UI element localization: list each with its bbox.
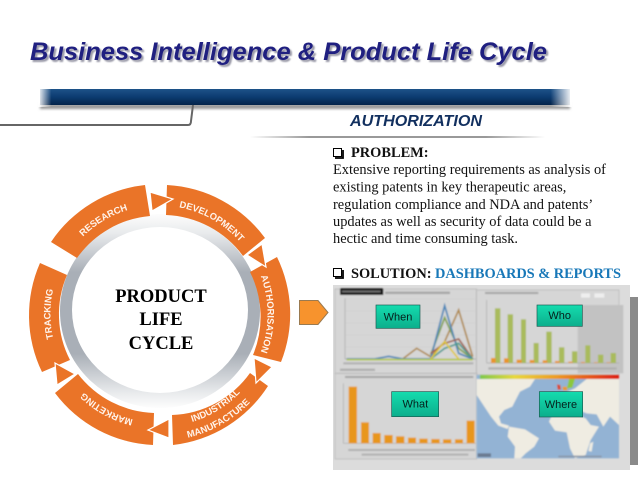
- problem text block: Extensive reporting requirements as analysis of: [333, 162, 606, 178]
- panel: where map: [477, 375, 619, 458]
- panel: who bar chart: [477, 290, 623, 375]
- section heading: authorization: AUTHORIZATION: [349, 113, 482, 130]
- problem text block: updates as well as security of data could be a: [333, 214, 592, 230]
- button: what: [392, 392, 439, 417]
- button: who: [537, 305, 582, 326]
- segment: industrial manufacture: MANUFACTURE: [186, 398, 250, 438]
- problem text block: PROBLEM:: [351, 145, 429, 161]
- segment: marketing: MARKETING: [80, 394, 132, 426]
- segment: authorisation: [250, 257, 290, 362]
- segment: authorisation: AUTHORISATION: [260, 276, 274, 354]
- life cycle wheel: [29, 185, 290, 445]
- panel: what bar chart: [335, 374, 477, 459]
- segment: development: [166, 185, 265, 256]
- title: Business Intelligence & Product Life Cycle: [32, 40, 549, 68]
- segment: marketing: [55, 374, 154, 445]
- button: when: When: [384, 311, 412, 323]
- grey ring: [60, 214, 260, 408]
- segment: development: DEVELOPMENT: [180, 201, 245, 240]
- segment: tracking: [29, 263, 70, 372]
- problem text block: [333, 145, 606, 247]
- arrow to dashboard: [300, 300, 328, 324]
- bullet: [334, 148, 343, 158]
- wheel centre label: LIFE: [139, 310, 183, 330]
- wheel centre label: [115, 287, 207, 354]
- wheel centre label: CYCLE: [129, 334, 193, 354]
- button: what: What: [403, 399, 428, 411]
- button: who: Who: [548, 310, 571, 322]
- segment: research: RESEARCH: [79, 204, 128, 236]
- problem text block: hectic and time consuming task.: [333, 231, 518, 247]
- problem text block: existing patents in key therapeutic areas,: [333, 180, 566, 196]
- arrows between segments: [55, 192, 272, 438]
- problem text block: regulation compliance and NDA and patents’: [333, 197, 593, 213]
- segment: tracking: TRACKING: [44, 289, 53, 340]
- header bar: [0, 87, 572, 125]
- title: Business Intelligence & Product Life Cycle: [30, 38, 547, 66]
- segment: industrial manufacture: [172, 373, 268, 445]
- button: where: Where: [545, 399, 577, 411]
- segment: industrial manufacture: INDUSTRIAL: [190, 391, 240, 422]
- segment: research: [51, 185, 150, 258]
- panel: when line chart: [335, 288, 477, 373]
- wheel centre label: PRODUCT: [115, 287, 207, 307]
- solution heading: SOLUTION: DASHBOARDS & REPORTS: [351, 266, 621, 282]
- button: when: [376, 305, 420, 328]
- dashboard screenshot: [333, 285, 638, 470]
- button: where: [539, 392, 583, 417]
